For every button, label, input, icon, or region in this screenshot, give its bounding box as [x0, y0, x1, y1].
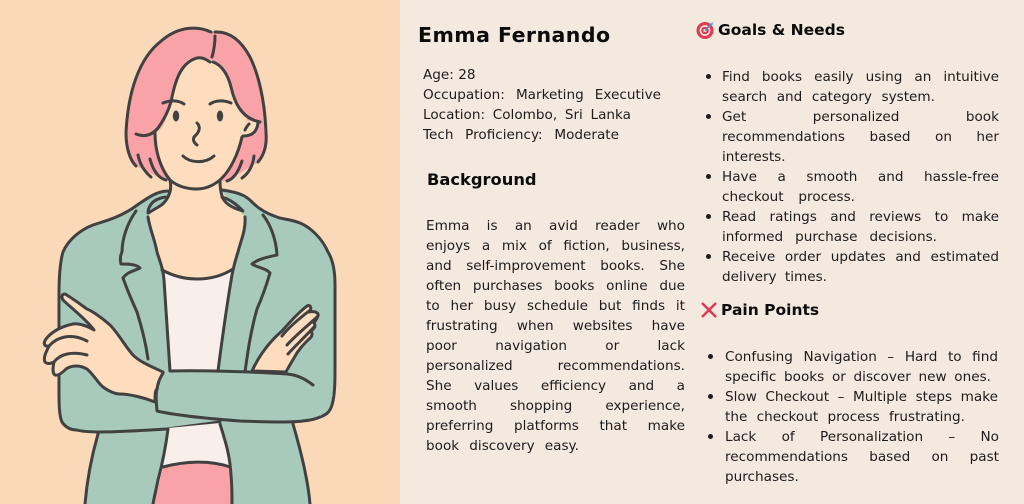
list: pain points: purchases.	[725, 469, 799, 485]
jacket	[59, 190, 335, 504]
list: goals and needs: search and category system.	[722, 89, 935, 105]
text block: background: personalized recommendations.	[426, 358, 685, 374]
list: pain points: the checkout process frustrating.	[725, 409, 965, 425]
text block: background: She values efficiency and a	[426, 378, 685, 394]
text block: background: frustrating when websites have	[426, 318, 685, 334]
list: pain points: Confusing Navigation – Hard to find	[725, 349, 998, 365]
text block: background: to her busy schedule but finds it	[426, 298, 685, 314]
text block: demographics: Location: Colombo, Sri Lanka	[423, 107, 631, 123]
text block: background	[426, 218, 685, 454]
shirt and skin chest	[148, 170, 245, 504]
list: pain points: specific books or discover new ones.	[725, 369, 991, 385]
icon: red cross	[701, 302, 717, 318]
text block: background: smooth shopping experience,	[426, 398, 685, 414]
text block: demographics: Tech Proficiency: Moderate	[423, 127, 619, 143]
list: goals and needs: Have a smooth and hassle-free	[722, 169, 999, 185]
near hand	[44, 294, 163, 402]
text block: background: book discovery easy.	[426, 438, 579, 454]
list: pain points: Lack of Personalization – No	[725, 429, 999, 445]
icon: target	[696, 22, 714, 39]
lapels	[120, 211, 277, 372]
list: goals and needs: Receive order updates and estimated	[722, 249, 999, 265]
heading: name: Emma Fernando	[418, 23, 611, 47]
heading: goals and needs: Goals & Needs	[718, 21, 845, 39]
panel: illustration background	[0, 0, 400, 504]
crossed forearm	[156, 371, 333, 422]
list: goals and needs: interests.	[722, 149, 786, 165]
text block: background: preferring platforms that make	[426, 418, 685, 434]
text block: background: poor navigation or lack	[426, 338, 685, 354]
list: goals and needs: Get personalized book	[722, 109, 999, 125]
text block: demographics	[422, 67, 661, 143]
face	[136, 57, 260, 189]
list: goals and needs: delivery times.	[722, 269, 827, 285]
text block: background: often purchases books online due	[426, 278, 685, 294]
hair	[126, 28, 266, 181]
heading: background: Background	[427, 170, 537, 189]
text block: demographics: Age: 28	[423, 67, 476, 83]
list: pain points: Slow Checkout – Multiple steps make	[725, 389, 998, 405]
list: goals and needs: Read ratings and reviews to make	[722, 209, 999, 225]
list: goals and needs: recommendations based on her	[722, 129, 999, 145]
heading: pain points: Pain Points	[721, 301, 819, 319]
text block: background: Emma is an avid reader who	[426, 218, 685, 234]
list: goals and needs: informed purchase decisions.	[722, 229, 937, 245]
list: goals and needs: checkout process.	[722, 189, 855, 205]
list: pain points: recommendations based on past	[725, 449, 999, 465]
far hand	[252, 306, 318, 372]
list: pain points	[708, 349, 999, 485]
illustration: woman with crossed arms	[42, 26, 336, 504]
panel: persona details	[400, 0, 1024, 504]
list: goals and needs: Find books easily using an intuitive	[722, 69, 999, 85]
neck and collar	[148, 180, 243, 213]
text block: background: and self-improvement books. She	[426, 258, 685, 274]
text block: demographics: Occupation: Marketing Executive	[423, 87, 661, 103]
list: goals and needs	[706, 69, 999, 285]
text block: background: enjoys a mix of fiction, business,	[426, 238, 685, 254]
